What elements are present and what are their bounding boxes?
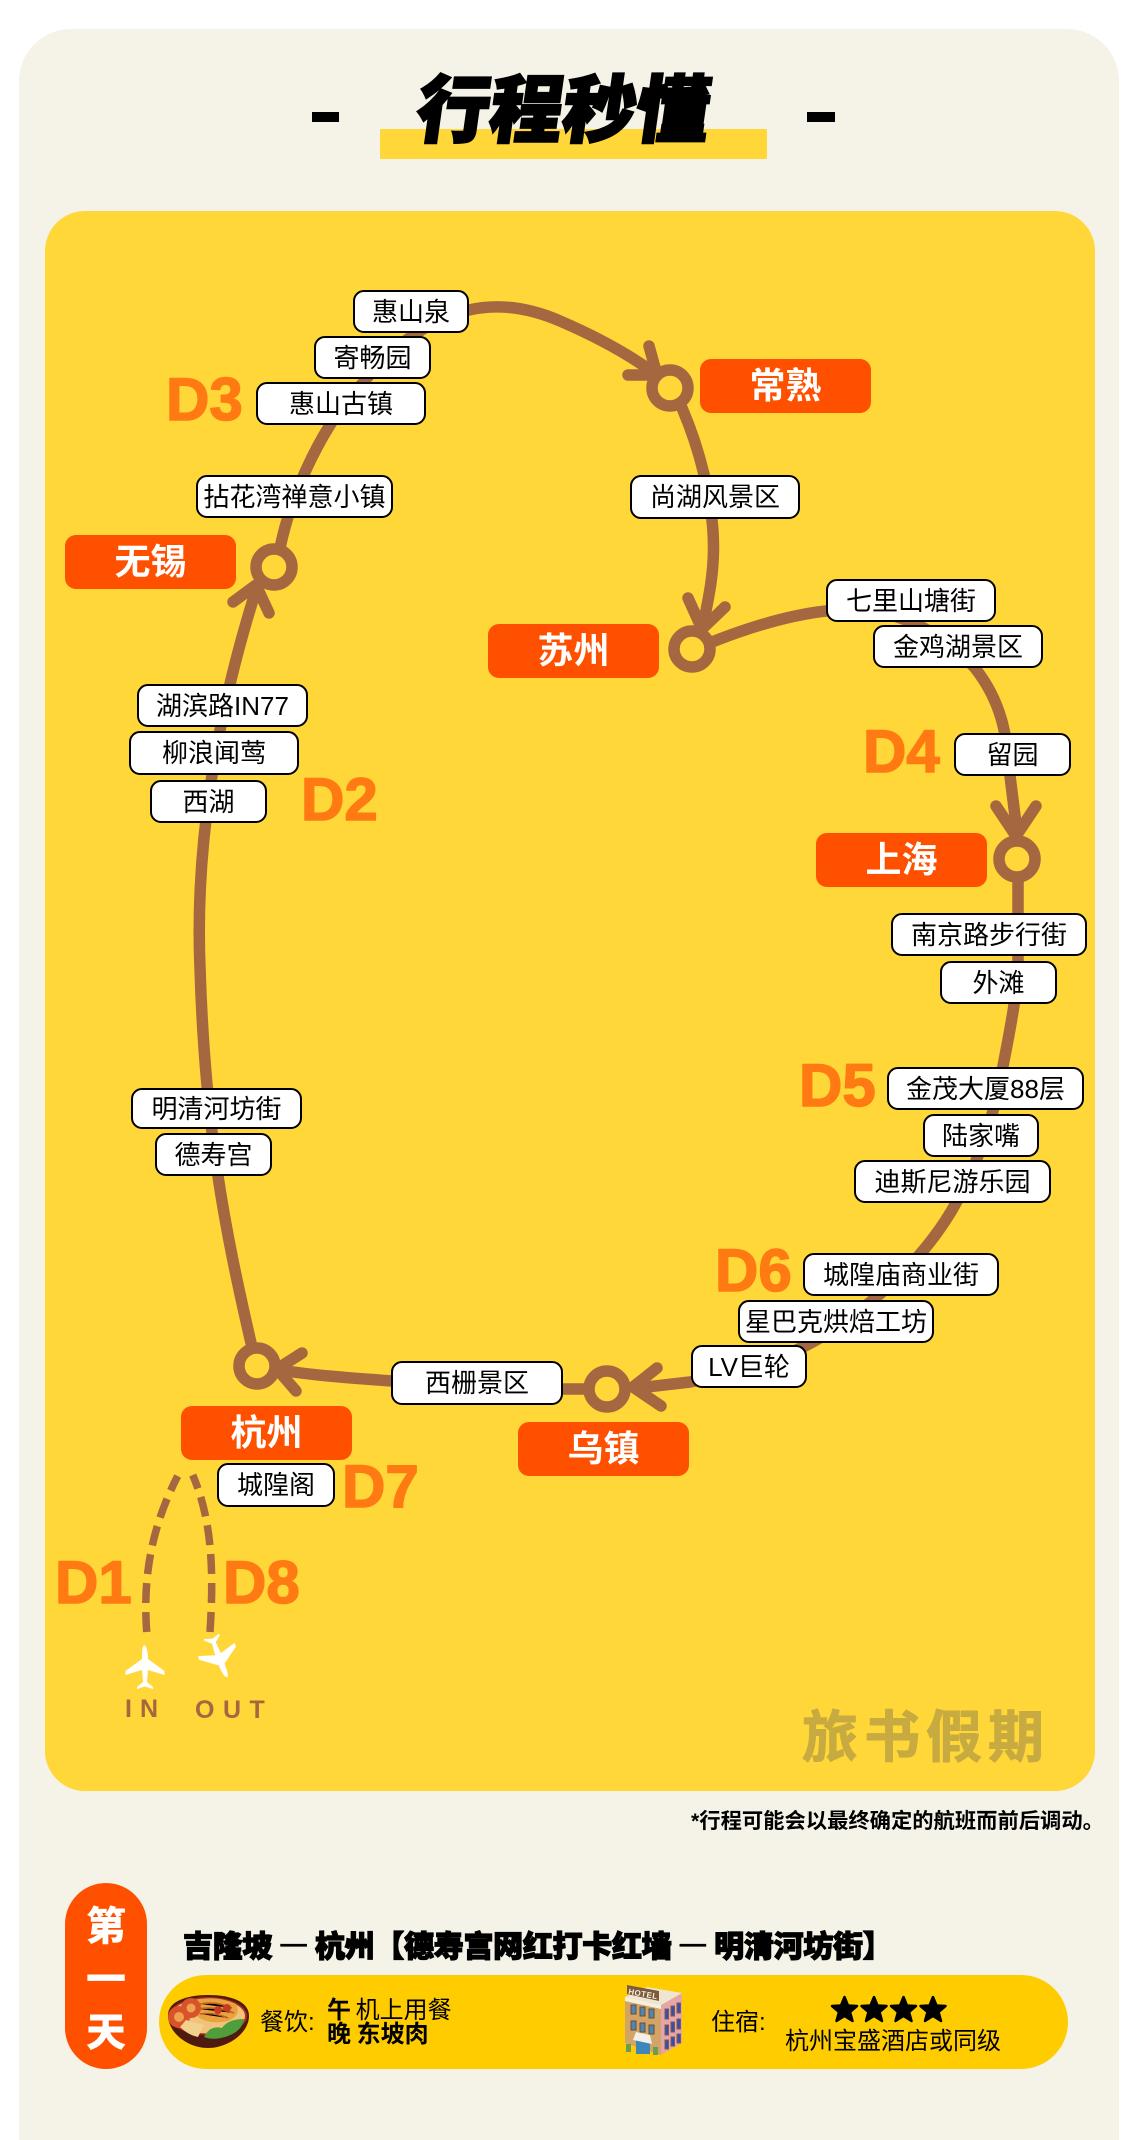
stop: 外滩: 外滩	[972, 968, 1024, 998]
icon: hotel building: HOTEL	[628, 1987, 658, 2001]
day badge: 第: 第	[86, 1894, 126, 1952]
route: Hangzhou to Wuxi	[199, 585, 269, 1343]
stop: 惠山泉: 惠山泉	[372, 296, 450, 326]
label: meals: 餐饮:	[260, 2009, 315, 2036]
city: 常熟	[700, 359, 871, 413]
dashed route: departure	[193, 1475, 212, 1632]
city: 苏州	[488, 624, 659, 678]
node: Suzhou	[674, 631, 710, 667]
city: 乌镇: 乌镇	[567, 1428, 640, 1469]
day badge: 一: 一	[86, 1947, 126, 2005]
title text: 行程秒懂	[411, 52, 718, 158]
stop: 七里山塘街	[826, 579, 996, 622]
stop: 陆家嘴: 陆家嘴	[942, 1120, 1020, 1150]
stop: 金茂大厦88层: 金茂大厦88层	[906, 1074, 1065, 1104]
city: 上海	[816, 833, 987, 887]
city: 杭州: 杭州	[230, 1412, 302, 1453]
stop: 南京路步行街: 南京路步行街	[911, 920, 1067, 950]
stop: 柳浪闻莺	[129, 731, 299, 775]
node: Hangzhou	[239, 1348, 275, 1384]
stop: 寄畅园: 寄畅园	[333, 342, 412, 372]
city: 无锡: 无锡	[114, 541, 186, 582]
day label: D1: D1	[55, 1549, 132, 1616]
hotel name: 杭州宝盛酒店或同级	[785, 2028, 1001, 2055]
stop: 德寿宫	[155, 1133, 272, 1176]
stop: 德寿宫: 德寿宫	[174, 1140, 252, 1170]
title	[312, 52, 835, 159]
city: 杭州	[181, 1406, 352, 1460]
route: Wuzhen to Hangzhou	[277, 1353, 585, 1391]
label: OUT: OUT	[195, 1696, 273, 1724]
title right dash	[807, 112, 835, 122]
day label: D5: D5	[799, 1052, 876, 1119]
route: Shanghai to Wuzhen	[633, 880, 1018, 1406]
route: Changshu to Suzhou	[682, 408, 725, 629]
route: Wuxi to Changshu	[280, 307, 657, 548]
icon: food bowl	[168, 1995, 249, 2048]
stop: 城隍庙商业街: 城隍庙商业街	[823, 1260, 979, 1290]
stop: 西栅景区: 西栅景区	[425, 1368, 529, 1398]
footnote: *行程可能会以最终确定的航班而前后调动。	[691, 1809, 1104, 1833]
stop: 南京路步行街	[891, 913, 1087, 956]
route: Suzhou to Shanghai	[712, 610, 1036, 836]
icon: arrival plane	[126, 1645, 164, 1689]
stop: 金鸡湖景区	[873, 625, 1043, 668]
stop: 西栅景区	[391, 1361, 563, 1405]
label: hotel: 住宿:	[711, 2009, 766, 2036]
stop: 陆家嘴	[923, 1114, 1039, 1157]
city: 常熟: 常熟	[749, 365, 822, 406]
panel: route map	[45, 211, 1095, 1791]
day label: D4: D4	[863, 718, 940, 785]
day label: D3: D3	[166, 366, 243, 433]
node: Changshu	[652, 370, 688, 406]
stop: LV巨轮	[691, 1345, 807, 1388]
icon: hotel building	[625, 1985, 682, 2055]
stop: 迪斯尼游乐园	[854, 1160, 1051, 1203]
stop: LV巨轮: LV巨轮	[708, 1352, 790, 1382]
stop: 尚湖风景区: 尚湖风景区	[650, 482, 780, 512]
stop: 惠山泉	[353, 290, 469, 333]
icon: departure plane	[193, 1630, 245, 1684]
stop: 湖滨路IN77	[137, 684, 308, 727]
day badge: 天: 天	[86, 2000, 126, 2058]
stop: 尚湖风景区	[630, 475, 800, 519]
node: Shanghai	[999, 841, 1035, 877]
node: Wuzhen	[589, 1371, 625, 1407]
city: 无锡	[65, 535, 236, 589]
day badge	[65, 1883, 147, 2069]
stop: 城隍阁: 城隍阁	[237, 1470, 315, 1500]
stop: 金鸡湖景区: 金鸡湖景区	[893, 632, 1023, 662]
title highlight bar	[380, 129, 767, 159]
meal: dinner: 晚 东坡肉	[327, 2021, 429, 2048]
stop: 拈花湾禅意小镇: 拈花湾禅意小镇	[203, 482, 386, 512]
day heading: 吉隆坡 — 杭州【德寿宫网红打卡红墙 — 明清河坊街】	[183, 1922, 892, 1966]
label: IN: IN	[125, 1695, 166, 1723]
day label: D8: D8	[223, 1549, 300, 1616]
stop: 留园	[954, 733, 1071, 776]
day label: D6: D6	[715, 1237, 792, 1304]
stop: 城隍阁	[217, 1463, 335, 1507]
info band	[159, 1975, 1068, 2069]
city: 乌镇	[518, 1422, 689, 1476]
stop: 留园: 留园	[986, 740, 1038, 770]
stop: 星巴克烘焙工坊: 星巴克烘焙工坊	[745, 1306, 927, 1336]
day label: D7: D7	[342, 1453, 419, 1520]
stop: 西湖: 西湖	[182, 786, 234, 816]
meal: lunch: 午 机上用餐	[327, 1997, 452, 2024]
city: 上海: 上海	[865, 839, 938, 880]
stop: 迪斯尼游乐园: 迪斯尼游乐园	[874, 1166, 1030, 1196]
stop: 西湖	[150, 780, 267, 823]
title left dash	[312, 112, 339, 122]
stop: 惠山古镇: 惠山古镇	[289, 388, 393, 418]
stop: 拈花湾禅意小镇	[196, 475, 393, 518]
stop: 湖滨路IN77: 湖滨路IN77	[156, 690, 289, 720]
stop: 七里山塘街: 七里山塘街	[846, 586, 976, 616]
stop: 惠山古镇	[256, 382, 426, 425]
stop: 外滩	[940, 961, 1057, 1004]
stop: 星巴克烘焙工坊	[738, 1300, 934, 1343]
city: 苏州: 苏州	[537, 630, 610, 671]
stop: 明清河坊街: 明清河坊街	[151, 1094, 282, 1124]
stop: 柳浪闻莺: 柳浪闻莺	[162, 738, 266, 768]
watermark: 旅书假期	[802, 1693, 1050, 1774]
node: Wuxi	[256, 549, 292, 585]
stop: 金茂大厦88层	[887, 1067, 1084, 1110]
stop: 明清河坊街	[131, 1088, 302, 1129]
stop: 寄畅园	[314, 336, 431, 379]
icon: four stars	[830, 1996, 947, 2022]
stop: 城隍庙商业街	[803, 1253, 999, 1296]
day label: D2: D2	[301, 766, 378, 833]
dashed route: arrival	[146, 1476, 178, 1632]
